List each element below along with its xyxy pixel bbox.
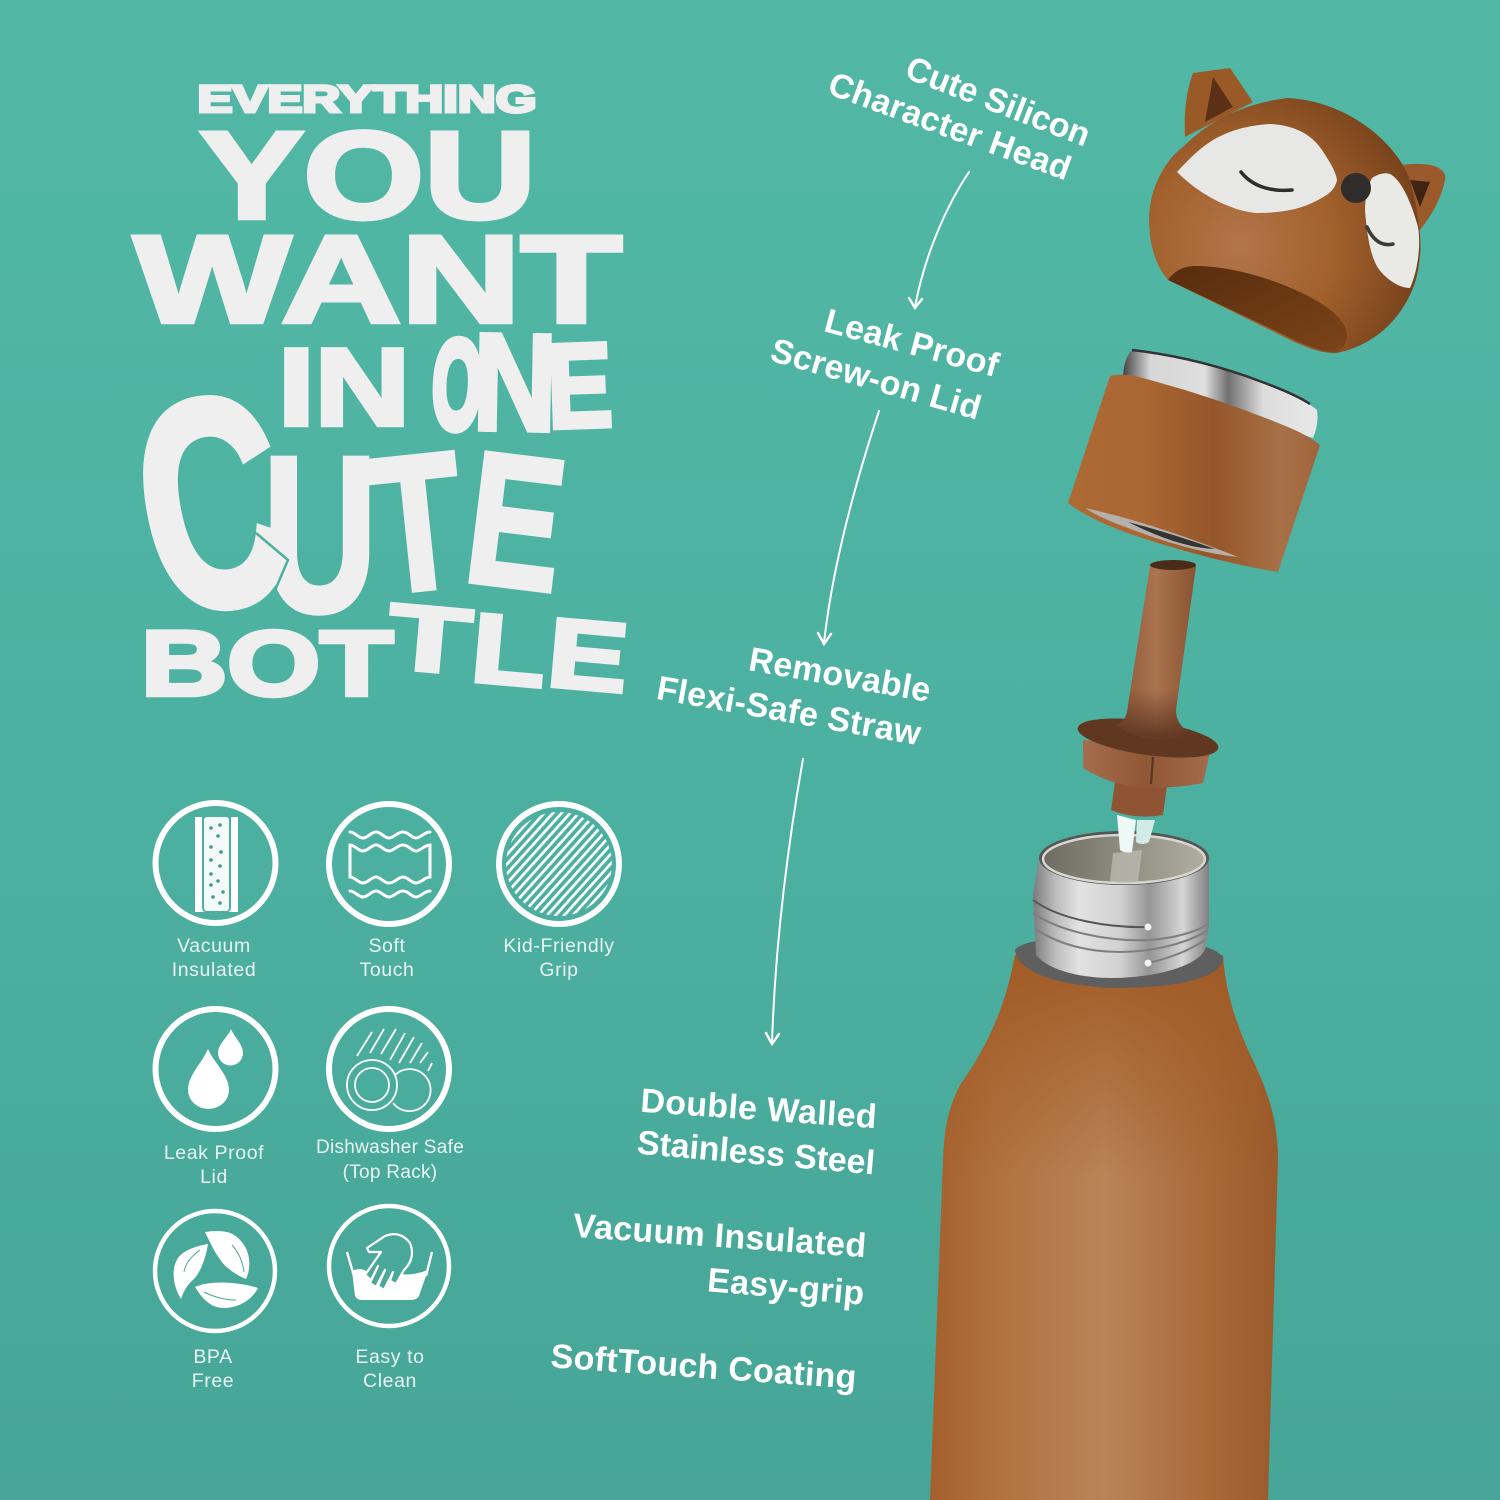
feature: vacuum insulated <box>156 803 276 981</box>
callout: vacuum insulated easy-grip <box>572 1207 868 1313</box>
label: Insulated <box>172 959 256 981</box>
label: Dishwasher Safe <box>316 1137 464 1158</box>
title word: one: E <box>545 319 615 454</box>
label: Clean <box>363 1370 417 1392</box>
label: Lid <box>200 1166 228 1188</box>
arrow: head to lid <box>909 172 969 308</box>
title word: one <box>429 306 615 461</box>
callout: removable flexi-safe straw: Removable <box>746 640 934 710</box>
feature: dishwasher safe <box>316 1009 464 1183</box>
arrow: straw to bottle <box>766 759 803 1044</box>
callout: softtouch coating: SoftTouch Coating <box>549 1337 858 1397</box>
closed eyes <box>1241 172 1292 190</box>
label: Grip <box>539 959 579 981</box>
title line: bottle: L <box>467 593 551 708</box>
bottle threaded neck <box>1033 831 1209 978</box>
icon: water drops <box>156 1009 276 1129</box>
title line: want: WANT <box>134 211 622 349</box>
feature: easy to clean <box>329 1206 449 1392</box>
label: Easy to <box>355 1346 425 1368</box>
callout: cute silicon character head: Cute Silicon <box>901 49 1095 154</box>
title word: cute: T <box>361 412 473 635</box>
eye patch left <box>1177 124 1337 213</box>
icon: vacuum wall <box>156 803 276 923</box>
title line: bottle <box>141 584 633 715</box>
head shape <box>1149 98 1420 353</box>
arrow: lid to straw <box>818 411 879 644</box>
label: Soft <box>368 935 406 957</box>
feature: soft touch <box>329 804 449 981</box>
cut between C and U <box>256 533 288 595</box>
title line: bottle: BOT <box>141 613 393 715</box>
nose <box>1341 173 1371 203</box>
icon: dishes <box>329 1009 449 1129</box>
straw <box>1075 560 1221 817</box>
title <box>111 79 633 715</box>
callout: vacuum insulated easy-grip: Easy-grip <box>706 1261 866 1313</box>
title word: cute: C <box>111 328 314 680</box>
label: (Top Rack) <box>343 1162 437 1183</box>
title word: cute <box>111 328 576 680</box>
bottle <box>930 68 1445 1500</box>
character head <box>1149 68 1445 353</box>
icon: soft waves <box>329 804 449 924</box>
lid underside <box>1085 508 1238 557</box>
feature: bpa free <box>155 1211 275 1392</box>
feature: kid-friendly grip <box>499 804 619 981</box>
callout: double walled stainless steel: Stainless Steel <box>635 1124 876 1182</box>
title line: everything: EVERYTHING <box>198 79 536 121</box>
icon: hand wash <box>329 1206 449 1326</box>
label: Touch <box>359 959 415 981</box>
label: Leak Proof <box>164 1142 264 1164</box>
title word: cute: E <box>456 412 576 632</box>
callout: cute silicon character head: Character Head <box>823 65 1076 188</box>
label: Free <box>192 1370 234 1392</box>
title line: in: IN <box>278 326 410 449</box>
icon: grip hatch <box>499 804 619 924</box>
feature: leak proof lid <box>156 1009 276 1188</box>
label: BPA <box>193 1346 233 1368</box>
ear right <box>1400 164 1445 230</box>
bottle body <box>930 955 1278 1500</box>
lid band <box>1068 375 1320 572</box>
callout: double walled stainless steel <box>635 1082 878 1182</box>
title line: bottle: E <box>543 598 633 714</box>
title line: you: YOU <box>200 107 536 245</box>
callout: leak proof screw-on lid: Leak Proof <box>821 302 1003 385</box>
ear left <box>1185 68 1253 137</box>
lid metal top <box>1123 350 1318 438</box>
label: Kid-Friendly <box>503 935 615 957</box>
panel: feature icons <box>155 803 619 1392</box>
title word: one: O <box>429 315 486 457</box>
eye patch right <box>1365 173 1419 288</box>
callout: leak proof screw-on lid: Screw-on Lid <box>766 331 986 428</box>
lid <box>1068 350 1320 572</box>
label: Vacuum <box>177 935 251 957</box>
title word: one: N <box>472 306 558 461</box>
title line: bottle: T <box>384 584 476 695</box>
callout: removable flexi-safe straw: Flexi-Safe Straw <box>654 669 924 753</box>
mouth opening <box>1168 266 1347 352</box>
straw clear tubes <box>1117 815 1155 853</box>
icon: recycling leaves <box>155 1211 275 1331</box>
title word: cute: U <box>263 411 377 658</box>
callout: vacuum insulated easy-grip: Vacuum Insulated <box>572 1207 868 1265</box>
bottle neck flange <box>1015 936 1223 988</box>
callout: double walled stainless steel: Double Walled <box>639 1082 878 1136</box>
